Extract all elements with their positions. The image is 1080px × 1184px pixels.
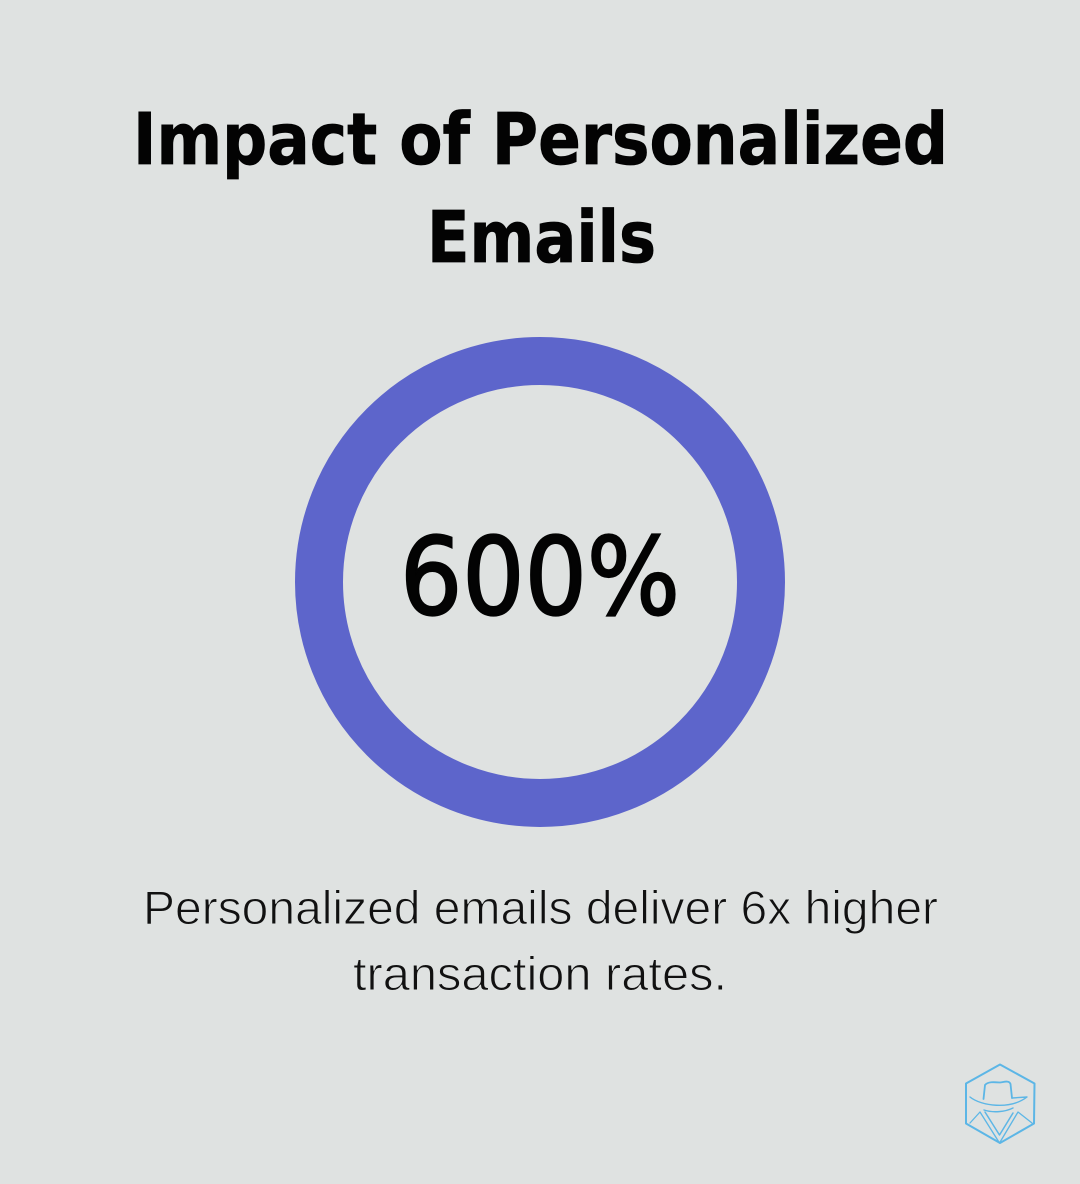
description text: Personalized emails deliver 6x higher [143,881,938,934]
description text: transaction rates. [353,947,727,1000]
title: Emails [427,196,656,279]
title [133,98,948,279]
icon: hexagon logo with hat figure [966,1064,1034,1143]
title: Impact of Personalized [133,98,948,181]
stat value: 600%: 600% [400,516,680,640]
donut ring [319,361,761,803]
description text [143,881,938,1000]
